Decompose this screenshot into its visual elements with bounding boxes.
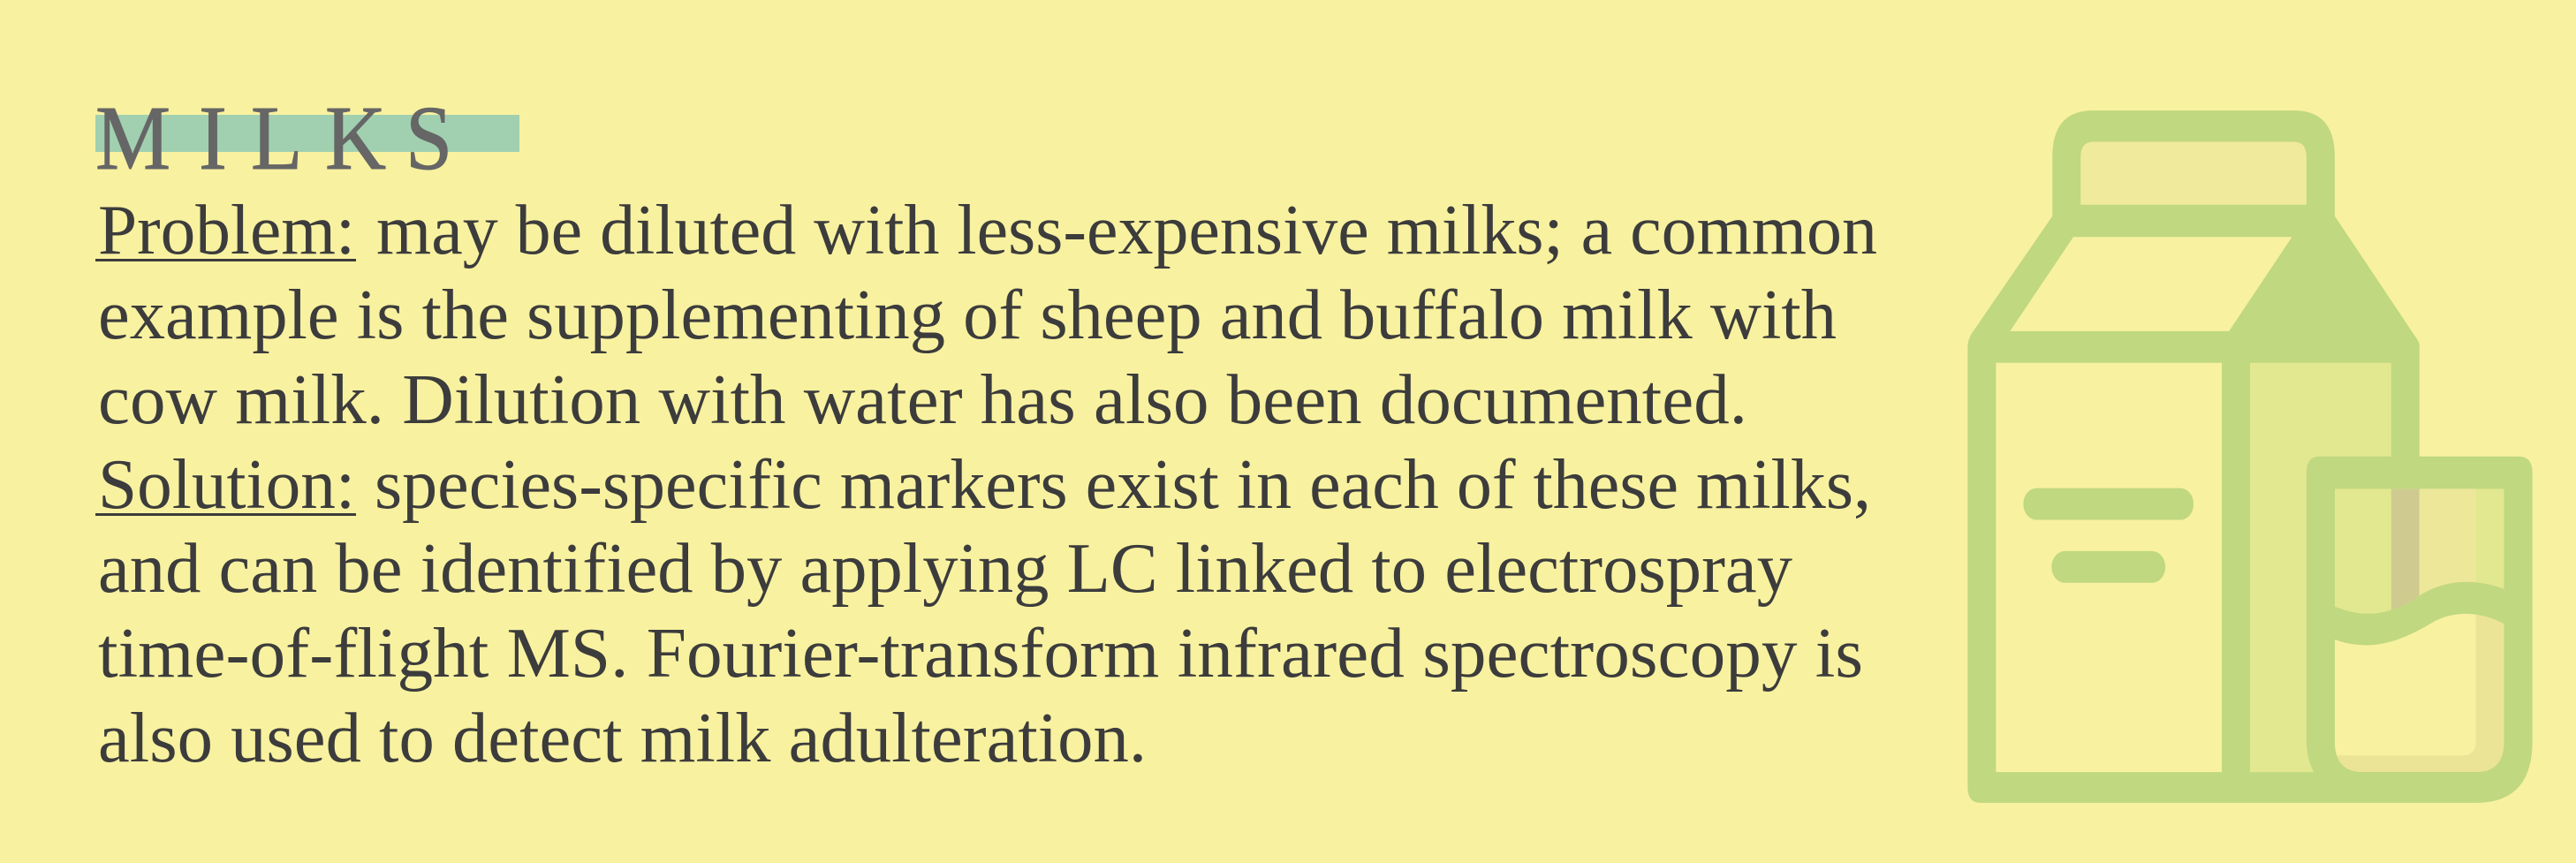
text block: solution xyxy=(95,446,1871,777)
text block: solution: Solution: xyxy=(98,446,355,524)
heading: MILKS with highlight bar: MILKS xyxy=(95,87,452,189)
text block: problem: may be diluted with less-expensive milks; a common xyxy=(376,192,1877,269)
text block: problem: Problem: xyxy=(98,192,355,269)
text block: solution: species-specific markers exist in each of these milks, xyxy=(375,446,1871,524)
text block: solution: time-of-flight MS. Fourier-transform infrared spectroscopy is xyxy=(98,615,1863,693)
text block: problem: example is the supplementing of sheep and buffalo milk with xyxy=(98,276,1837,354)
text block: solution: also used to detect milk adulteration. xyxy=(98,700,1147,777)
icon: milk carton and glass xyxy=(1967,110,2533,803)
panel: milks infographic xyxy=(95,108,2533,803)
text block: problem: cow milk. Dilution with water has also been documented. xyxy=(98,361,1747,439)
text block: solution: and can be identified by applying LC linked to electrospray xyxy=(98,530,1792,608)
text block: problem xyxy=(95,192,1877,439)
